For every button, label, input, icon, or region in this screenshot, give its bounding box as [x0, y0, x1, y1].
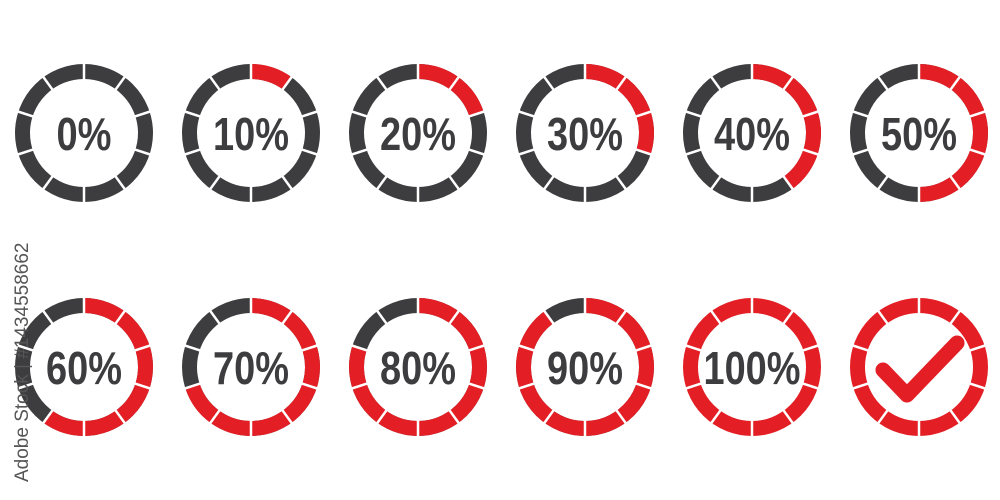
ring: 70%: 70%: [213, 342, 289, 394]
ring: 30%: 30%: [547, 108, 623, 160]
ring: 90%: [517, 295, 653, 439]
ring: 40%: [684, 61, 820, 205]
ring: 30%: [517, 61, 653, 205]
ring: 100%: 100%: [704, 342, 800, 394]
ring: 0%: [16, 61, 152, 205]
ring: 10%: [183, 61, 319, 205]
ring: 90%: 90%: [547, 342, 623, 394]
ring: 70%: [183, 295, 319, 439]
ring: 100%: [684, 295, 820, 439]
ring: 0%: 0%: [56, 108, 112, 160]
ring: 80%: [350, 295, 486, 439]
ring: 50%: 50%: [881, 108, 957, 160]
ring: 60%: [16, 295, 152, 439]
icon: checkmark: [883, 343, 957, 395]
ring: complete with checkmark: [851, 295, 987, 439]
ring: 20%: [350, 61, 486, 205]
ring: 80%: 80%: [380, 342, 456, 394]
ring: 20%: 20%: [380, 108, 456, 160]
ring: 50%: [851, 61, 987, 205]
ring: 60%: 60%: [46, 342, 122, 394]
ring: 10%: 10%: [213, 108, 289, 160]
watermark text: Adobe Stock | #1434558662: [12, 243, 33, 482]
ring: 40%: 40%: [714, 108, 790, 160]
